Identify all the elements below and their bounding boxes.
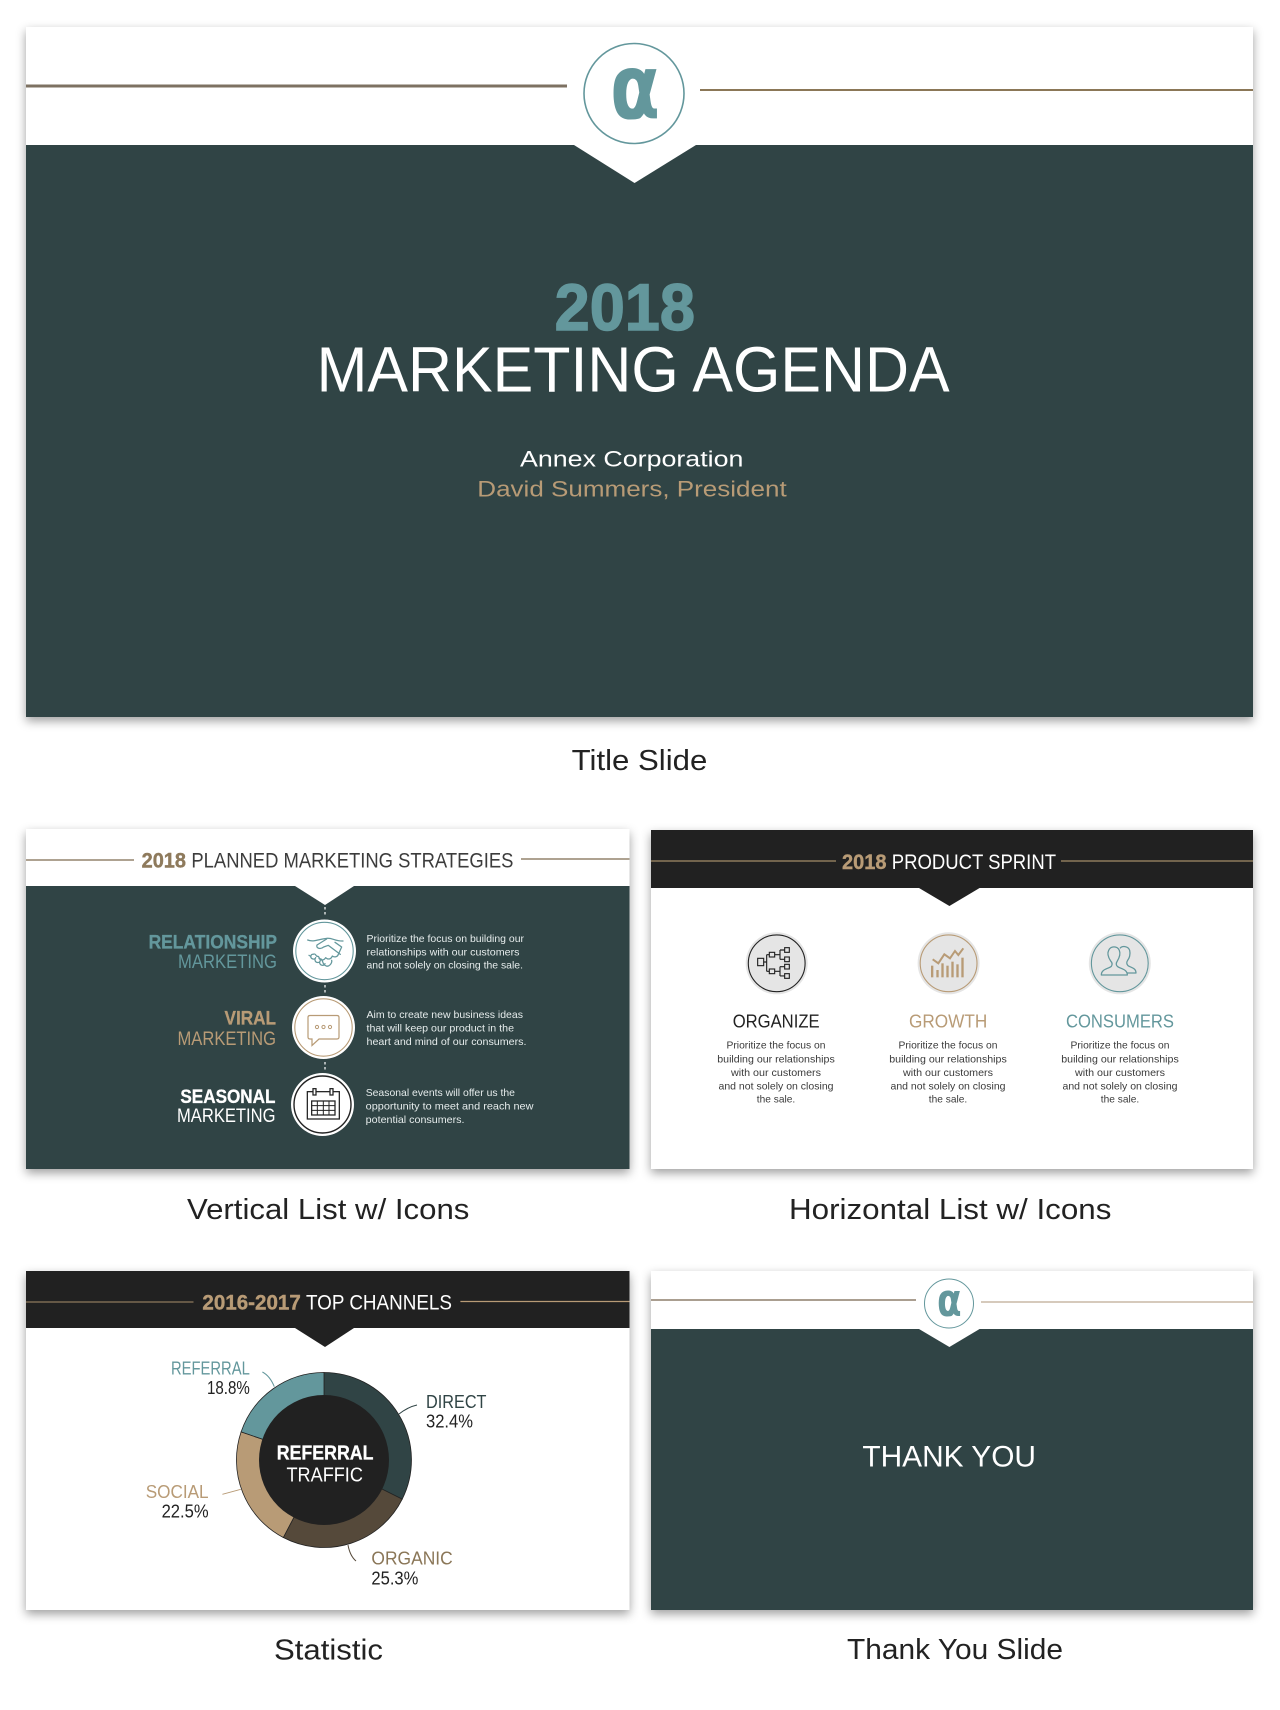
title: marketing agenda: MARKETING AGENDA	[317, 334, 950, 406]
center label	[259, 1395, 389, 1525]
icon: growth chart	[918, 932, 980, 994]
icon: org chart	[746, 932, 808, 994]
text: relationship description: Prioritize the focus on building our	[366, 933, 525, 945]
column: organize	[717, 932, 835, 1106]
caption: horizontal list: Horizontal List w/ Icons	[789, 1194, 1111, 1226]
text: organize description: Prioritize the focus on	[726, 1040, 826, 1052]
text: presenter: David Summers, President	[477, 477, 787, 502]
icon: alpha logo	[584, 35, 684, 144]
panel: vertical list	[26, 829, 630, 1169]
text: organize description: the sale.	[757, 1094, 795, 1106]
label: seasonal marketing	[177, 1087, 276, 1127]
label: organic: 25.3%	[371, 1567, 418, 1588]
text: organize description: building our relationships	[717, 1053, 835, 1065]
text: relationship description: relationships with our customers	[366, 946, 520, 958]
panel: title slide	[26, 27, 1253, 717]
text: seasonal description: Seasonal events will offer us the	[366, 1087, 515, 1099]
label: organic: ORGANIC	[371, 1547, 453, 1568]
heading: top channels: 2016-2017	[202, 1291, 301, 1314]
heading: top channels: TOP CHANNELS	[306, 1291, 452, 1314]
text: growth description: with our customers	[902, 1067, 993, 1079]
label: growth: GROWTH	[909, 1010, 987, 1031]
icon: pointer	[295, 886, 354, 905]
text: growth description: Prioritize the focus on	[898, 1040, 998, 1052]
text: viral description: Aim to create new business ideas	[366, 1009, 523, 1021]
icon: pointer	[919, 888, 980, 906]
label: referral: 18.8%	[207, 1377, 250, 1398]
text: growth description: building our relationships	[889, 1053, 1007, 1065]
caption: title slide: Title Slide	[572, 745, 707, 777]
icon: handshake	[293, 920, 356, 982]
label: consumers: CONSUMERS	[1066, 1010, 1174, 1031]
icon: pointer	[295, 1328, 354, 1347]
label: seasonal marketing: SEASONAL	[180, 1087, 276, 1108]
text: organize description: with our customers	[730, 1067, 821, 1079]
segment: social 22.5%	[236, 1432, 324, 1538]
center label: TRAFFIC	[286, 1465, 363, 1487]
text: organize description	[717, 1040, 835, 1106]
chart: referral traffic donut	[236, 1372, 411, 1548]
label: viral marketing	[178, 1009, 276, 1050]
heading: product sprint	[842, 851, 1056, 874]
label: relationship marketing	[149, 933, 277, 973]
label: direct	[399, 1391, 486, 1432]
caption: vertical list: Vertical List w/ Icons	[187, 1194, 469, 1226]
text: company: Annex Corporation	[520, 447, 743, 472]
column: growth	[889, 932, 1007, 1106]
text: viral description: heart and mind of our consumers.	[366, 1036, 526, 1048]
column: consumers	[1061, 932, 1179, 1106]
panel: statistic	[26, 1271, 630, 1610]
label: organize: ORGANIZE	[733, 1010, 820, 1031]
label: relationship marketing: MARKETING	[178, 952, 277, 973]
heading: product sprint: 2018	[842, 851, 887, 874]
caption: thank you slide: Thank You Slide	[847, 1634, 1063, 1666]
label: direct: 32.4%	[426, 1411, 473, 1432]
text: consumers description: with our customers	[1074, 1067, 1165, 1079]
heading: product sprint: PRODUCT SPRINT	[892, 851, 1056, 874]
text: growth description: the sale.	[929, 1094, 967, 1106]
center label: REFERRAL	[277, 1442, 374, 1464]
text: consumers description: building our relationships	[1061, 1053, 1179, 1065]
text: seasonal description: potential consumers.	[366, 1114, 464, 1126]
icon: speech bubble	[292, 996, 355, 1059]
heading: planned marketing strategies: PLANNED MARKETING STRATEGIES	[191, 849, 513, 872]
icon: pointer	[574, 145, 696, 183]
label: social: 22.5%	[162, 1501, 209, 1522]
segment: direct 32.4%	[324, 1372, 411, 1499]
text: consumers description	[1061, 1040, 1179, 1106]
label: direct: DIRECT	[426, 1391, 486, 1412]
text: relationship description: and not solely on closing the sale.	[366, 960, 523, 972]
text: growth description	[889, 1040, 1007, 1106]
label: social	[146, 1481, 241, 1522]
text: seasonal description: opportunity to meet and reach new	[366, 1100, 534, 1112]
label: seasonal marketing: MARKETING	[177, 1106, 276, 1127]
label: viral marketing: VIRAL	[224, 1009, 276, 1030]
segment: organic 25.3%	[283, 1460, 402, 1548]
label: referral	[171, 1357, 274, 1398]
label: relationship marketing: RELATIONSHIP	[149, 933, 277, 954]
icon: two people	[1089, 932, 1151, 994]
text: organize description: and not solely on closing	[718, 1080, 834, 1092]
label: social: SOCIAL	[146, 1481, 209, 1502]
title: 2018: 2018	[555, 270, 695, 344]
text: seasonal description	[366, 1087, 534, 1126]
heading: top channels	[202, 1291, 452, 1314]
heading: thank you: THANK YOU	[862, 1441, 1036, 1474]
icon: alpha logo: α	[610, 35, 660, 140]
text: growth description: and not solely on closing	[890, 1080, 1006, 1092]
caption: statistic: Statistic	[274, 1634, 383, 1666]
text: viral description: that will keep our product in the	[366, 1022, 514, 1034]
icon: alpha logo: α	[937, 1274, 962, 1327]
segment: referral 18.8%	[241, 1372, 324, 1460]
label: viral marketing: MARKETING	[178, 1029, 276, 1050]
text: relationship description	[366, 933, 525, 972]
label: organic	[348, 1545, 453, 1588]
text: consumers description: and not solely on closing	[1062, 1080, 1178, 1092]
icon: calendar	[291, 1073, 354, 1136]
icon: alpha logo	[924, 1274, 974, 1328]
heading: planned marketing strategies: 2018	[142, 849, 186, 872]
text: consumers description: Prioritize the focus on	[1070, 1040, 1170, 1052]
text: viral description	[366, 1009, 526, 1048]
label: referral: REFERRAL	[171, 1357, 250, 1378]
panel: horizontal list	[651, 830, 1253, 1169]
icon: pointer	[919, 1329, 980, 1347]
panel: thank you slide	[651, 1271, 1253, 1610]
text: consumers description: the sale.	[1101, 1094, 1139, 1106]
